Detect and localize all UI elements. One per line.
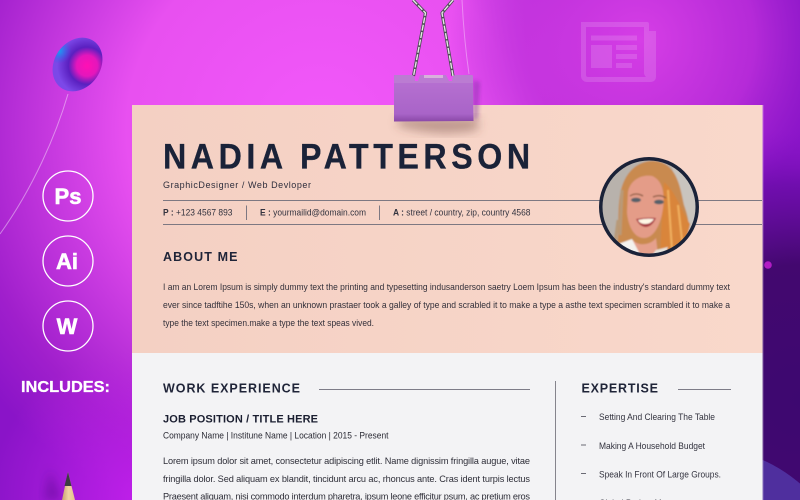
work description: Lorem ipsum dolor sit amet, consectetur adipiscing etlit. Name dignissim fringilla augue, vitae bbox=[163, 456, 530, 466]
about me paragraph: type the text specimen.make a type the text speas vived. bbox=[163, 318, 374, 328]
about me paragraph bbox=[163, 282, 731, 328]
contact bar: E : yourmailid@domain.com bbox=[260, 208, 366, 218]
panel: resume sheet bbox=[132, 105, 764, 500]
column divider bbox=[554, 381, 556, 500]
expertise list: Setting And Clearing The Table bbox=[599, 412, 715, 422]
icon: newspaper bbox=[581, 22, 656, 82]
contact bar: A : street / country, zip, country 4568 bbox=[393, 208, 530, 218]
expertise list bbox=[581, 412, 721, 500]
contact bar: P : +123 4567 893 bbox=[163, 208, 232, 218]
balloon string bbox=[0, 94, 68, 234]
panel: header peach bbox=[132, 105, 762, 353]
job title: JOB POSITION / TITLE HERE bbox=[163, 414, 318, 426]
work description bbox=[163, 456, 530, 500]
portrait photo bbox=[599, 157, 700, 258]
about me paragraph: I am an Lorem Ipsum is simply dummy text the printing and typesetting indusanderson saetry Loem Ipsum has been the industry's standard dummy text bbox=[163, 282, 730, 292]
icon: Ps badge: Ps bbox=[55, 184, 81, 209]
name heading: NADIA PATTERSON bbox=[163, 138, 530, 177]
job subtitle: GraphicDesigner / Web Devloper bbox=[163, 180, 311, 190]
work experience heading: WORK EXPERIENCE bbox=[163, 382, 300, 396]
about me paragraph: ever since tadftihe 150s, when an unknown prastaer took a galley of type and scrabled it to make a type a asthe text specimen scrambled it to make a bbox=[163, 300, 731, 310]
about me heading: ABOUT ME bbox=[163, 250, 238, 264]
expertise list: Making A Household Budget bbox=[599, 441, 705, 451]
icon: Ai badge bbox=[43, 236, 93, 286]
includes label: INCLUDES: bbox=[21, 379, 110, 396]
company line: Company Name | Institune Name | Location | 2015 - Present bbox=[163, 430, 389, 440]
icon: W badge: W bbox=[57, 314, 78, 339]
icon: Ps badge bbox=[43, 171, 93, 221]
dot bbox=[764, 261, 772, 269]
contact bar bbox=[163, 200, 762, 224]
clip shadow bbox=[398, 118, 478, 133]
icon: W badge bbox=[43, 301, 93, 351]
expertise list: Speak In Front Of Large Groups. bbox=[599, 470, 721, 480]
icon: balloon bbox=[42, 28, 113, 101]
work description: fringilla dolor. Sed aliquam ex blandit, tincidunt arcu ac, rhoncus ante. Cras ident turpis lectus bbox=[163, 474, 530, 484]
icon: Ai badge: Ai bbox=[56, 249, 78, 274]
background blob bbox=[546, 446, 800, 500]
panel: lower white section bbox=[132, 353, 762, 500]
expertise heading: EXPERTISE bbox=[582, 382, 658, 396]
icon: pencil bbox=[44, 470, 75, 500]
icon: binder clip bbox=[394, 0, 480, 122]
